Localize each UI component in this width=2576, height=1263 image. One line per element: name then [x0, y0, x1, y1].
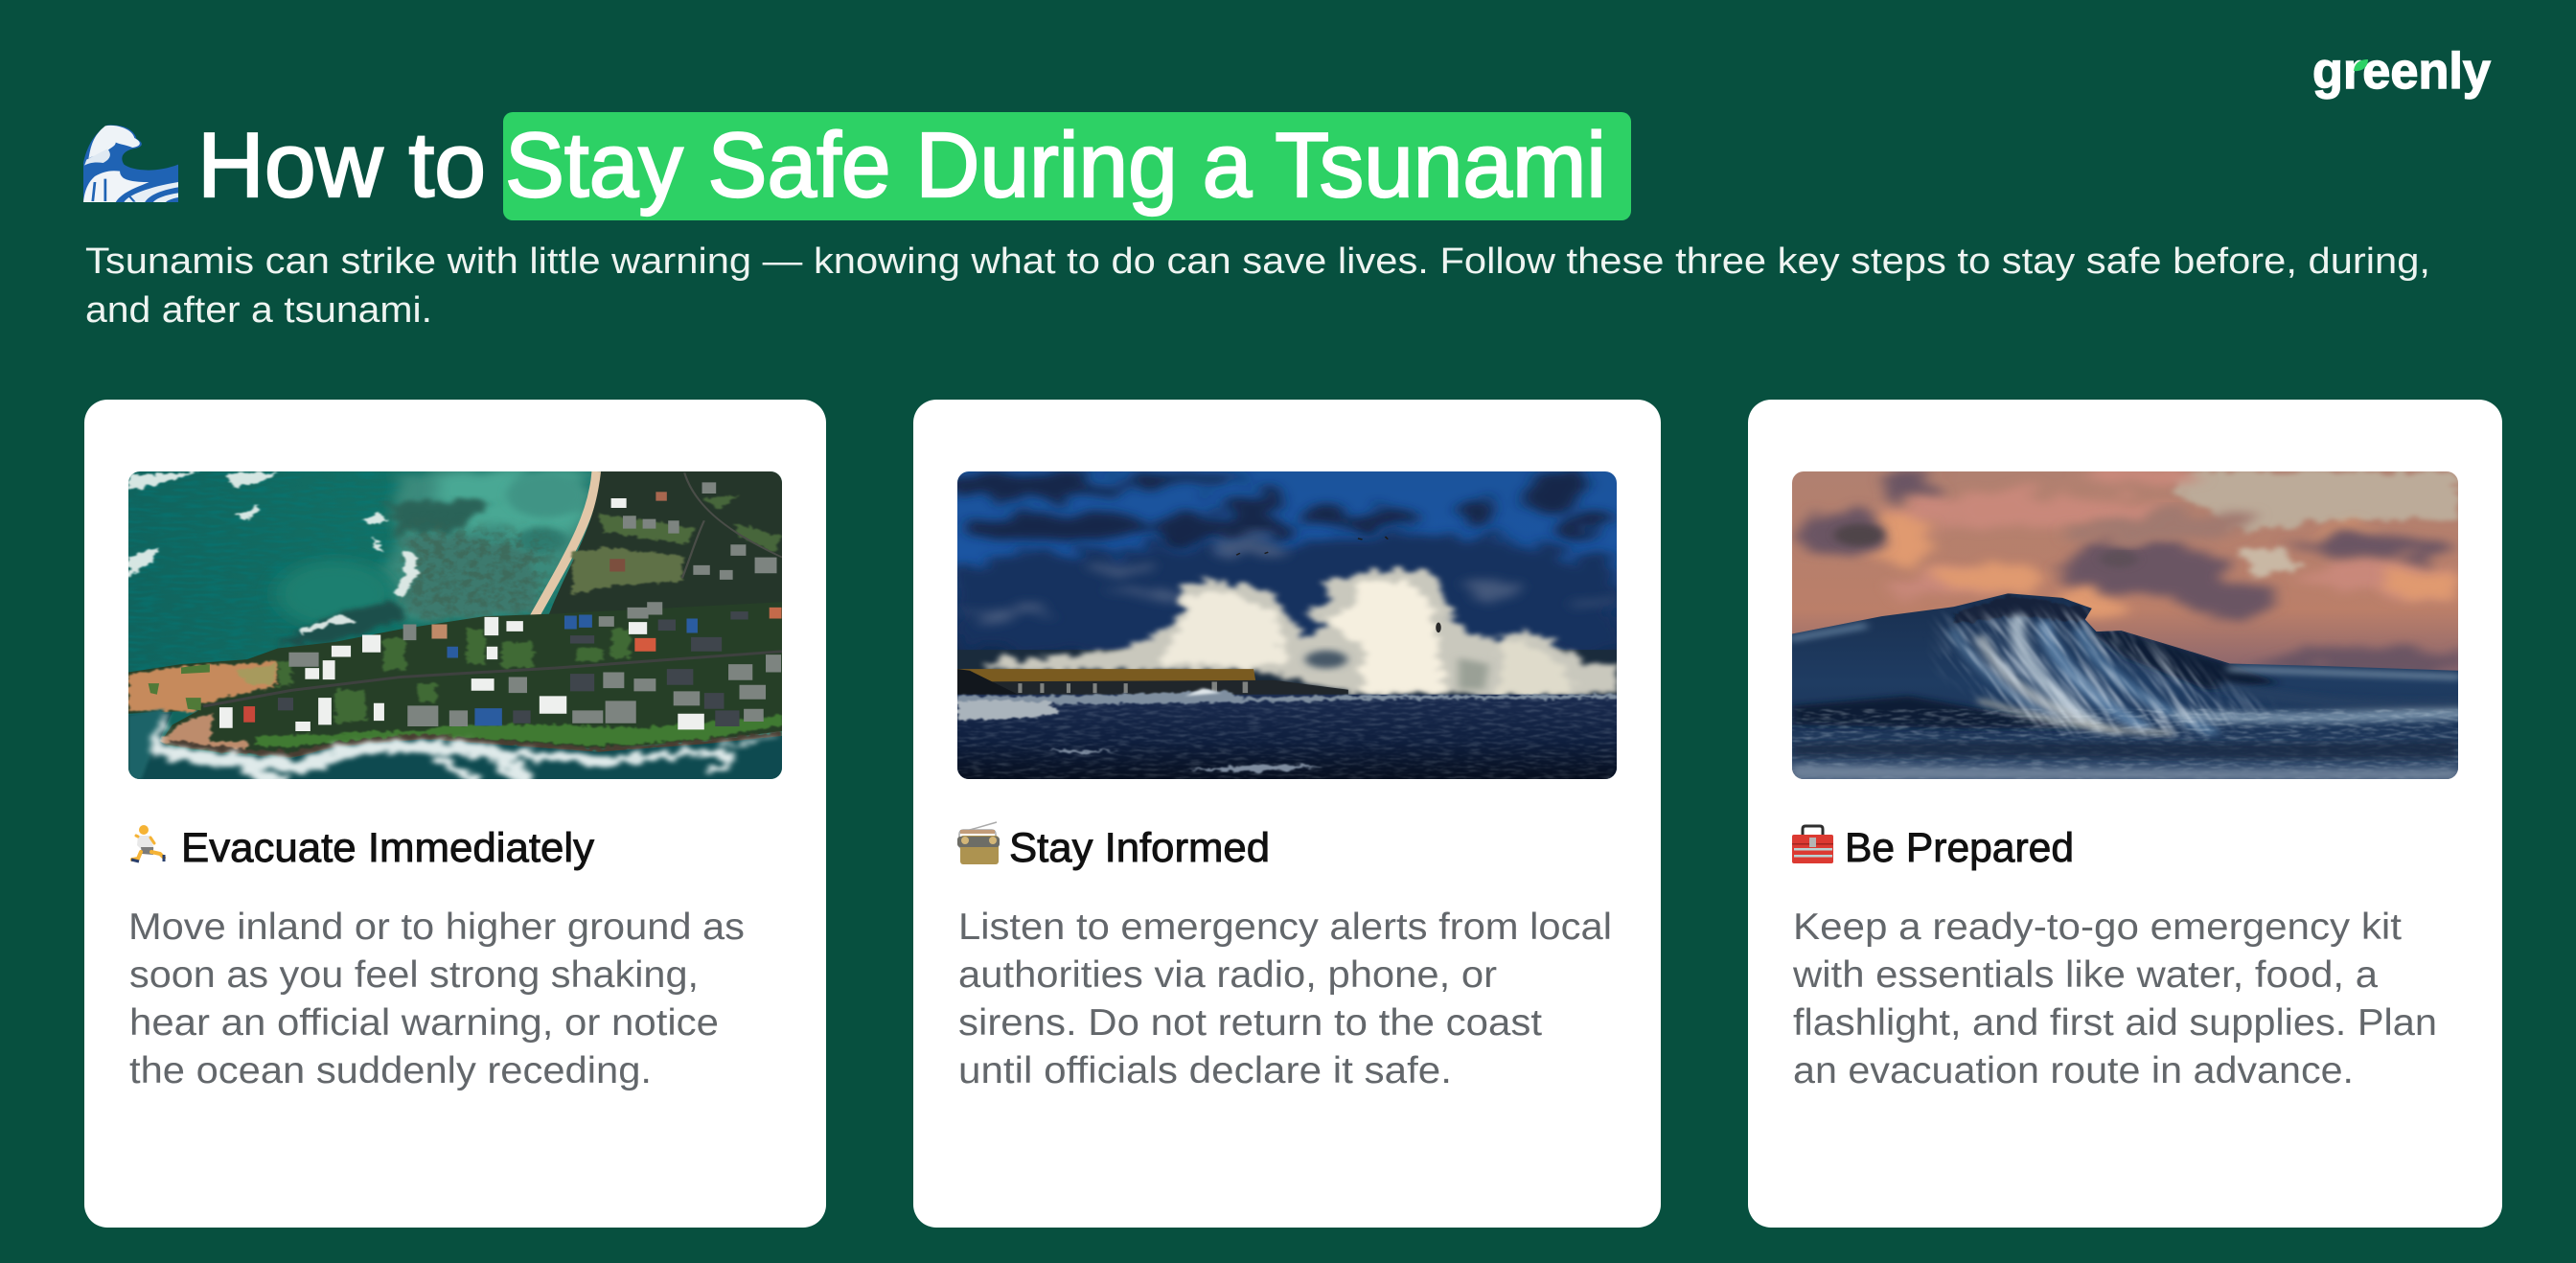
panel: stay informed [913, 400, 1661, 1228]
subtitle: and after a tsunami. [85, 290, 432, 331]
panel: evacuate immediately [84, 400, 826, 1228]
body: evacuate immediately: soon as you feel strong shaking, [129, 954, 699, 996]
body: evacuate immediately: Move inland or to higher ground as [128, 907, 745, 948]
heading: evacuate immediately: Evacuate Immediately [181, 825, 595, 871]
heading: be prepared: Be Prepared [1845, 825, 2074, 871]
icon: toolbox [1792, 826, 1833, 863]
icon: radio [957, 822, 1000, 864]
body: be prepared: Keep a ready-to-go emergency kit [1793, 907, 2402, 948]
body: stay informed [958, 907, 1612, 1091]
body: evacuate immediately: hear an official warning, or notice [129, 1002, 719, 1044]
title [83, 112, 1631, 220]
photo: waves crashing over pier [943, 471, 1617, 779]
logo: greenly: greenly [2312, 43, 2492, 100]
title: How to [197, 114, 486, 217]
body: evacuate immediately: the ocean suddenly receding. [129, 1050, 652, 1091]
body: be prepared: an evacuation route in advance. [1793, 1050, 2354, 1091]
body: stay informed: authorities via radio, phone, or [958, 954, 1497, 996]
heading: stay informed: Stay Informed [1009, 825, 1270, 871]
subtitle [85, 241, 2430, 331]
panel: be prepared [1748, 400, 2502, 1228]
body: be prepared [1792, 907, 2437, 1091]
subtitle: Tsunamis can strike with little warning — knowing what to do can save lives. Follow these three key steps to stay safe before, during, [85, 241, 2430, 282]
title highlight: Stay Safe During a Tsunami [505, 114, 1606, 217]
body: evacuate immediately [128, 907, 745, 1091]
body: be prepared: with essentials like water, food, a [1792, 954, 2378, 996]
icon: runner [131, 825, 164, 861]
icon: great wave [83, 125, 178, 202]
body: stay informed: Listen to emergency alerts from local [958, 907, 1612, 948]
body: stay informed: until officials declare it safe. [958, 1050, 1452, 1091]
photo: aerial coastline [128, 471, 782, 782]
photo: ocean wave at sunset [1792, 471, 2458, 779]
body: be prepared: flashlight, and first aid supplies. Plan [1793, 1002, 2437, 1044]
body: stay informed: sirens. Do not return to the coast [958, 1002, 1542, 1044]
